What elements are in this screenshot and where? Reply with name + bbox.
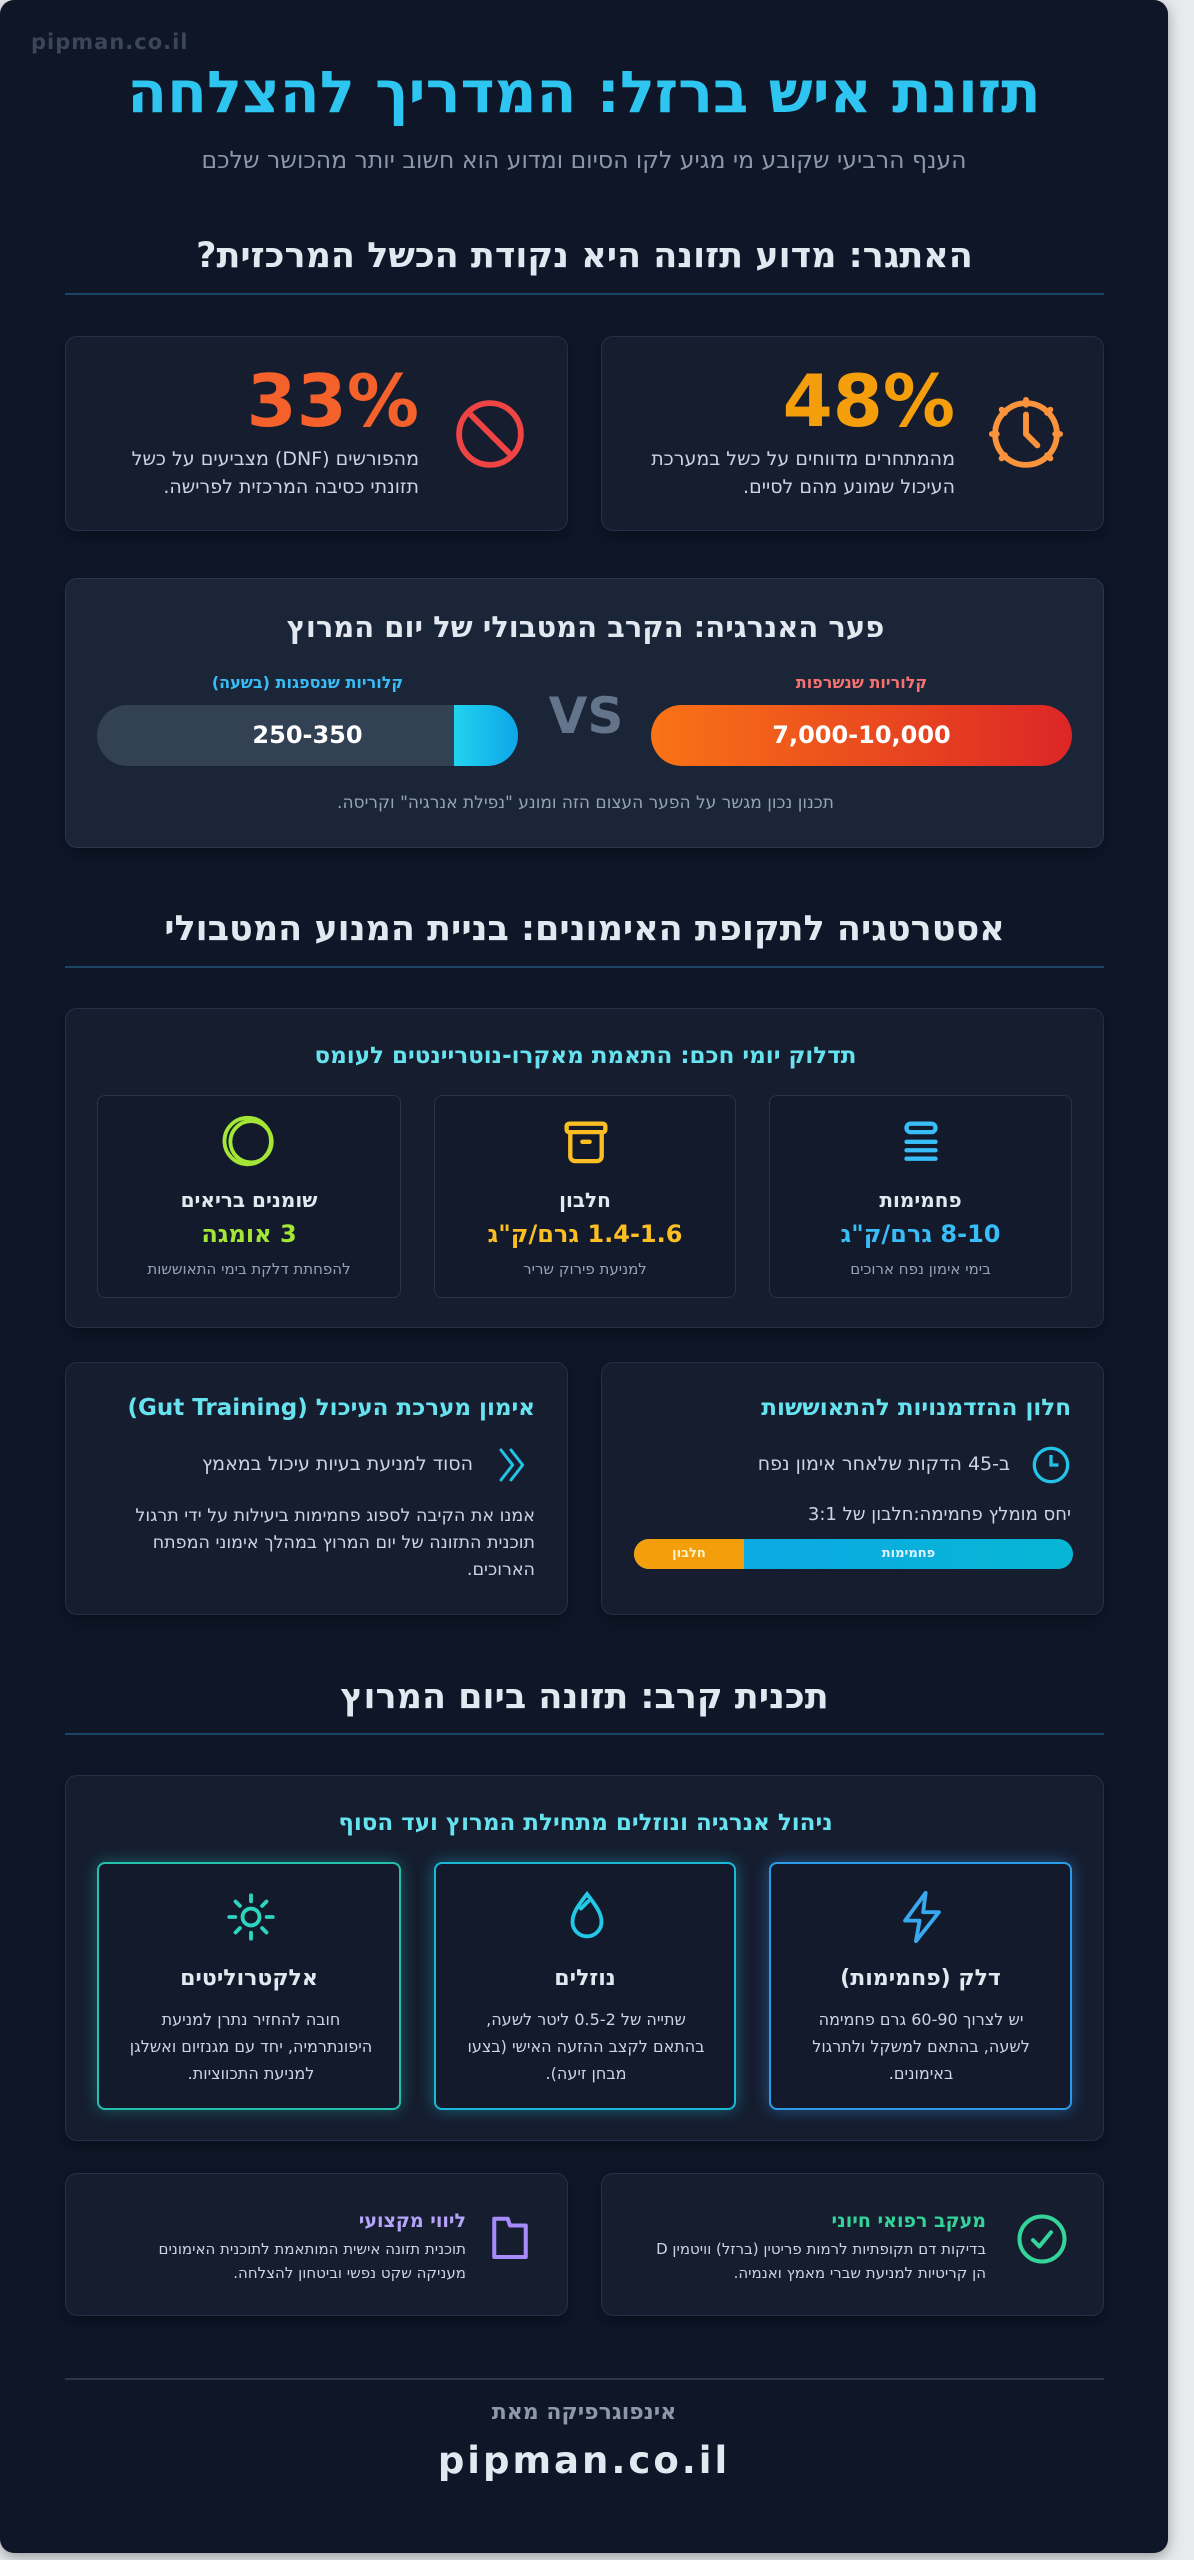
card: gut training: [65, 1362, 568, 1615]
card: professional guidance: תוכנית תזונה אישית המותאמת לתוכנית האימונים מעניקה שקט נפשי וביטחון להצלחה.: [158, 2240, 466, 2282]
box: carbs: בימי אימון נפח ארוכים: [850, 1260, 991, 1278]
icon: drop: [570, 1891, 604, 1938]
box: fats: שומנים בריאים: [181, 1188, 317, 1212]
card: recovery window: יחס מומלץ פחמימה:חלבון של 3:1: [808, 1504, 1071, 1525]
card: recovery window: [601, 1362, 1104, 1615]
icon: layers: [904, 1122, 938, 1161]
box: fats: 3 אומגה: [201, 1220, 297, 1248]
box: fuel: דלק (פחמימות): [840, 1966, 1001, 1991]
stat card: 33%: [65, 336, 568, 531]
box: carbs: [769, 1095, 1072, 1298]
panel: race day fueling: [65, 1775, 1104, 2141]
box: protein: [434, 1095, 736, 1298]
box: fuel: [769, 1862, 1072, 2110]
card: medical tracking: מעקב רפואי חיוני: [832, 2210, 986, 2232]
card: medical tracking: [601, 2173, 1104, 2316]
heading: race day: תכנית קרב: תזונה ביום המרוץ: [340, 1677, 829, 1717]
icon: chevrons: [499, 1448, 524, 1482]
icon: check circle: [1018, 2214, 1066, 2264]
icon: clock: [989, 397, 1063, 468]
title: תזונת איש ברזל: המדריך להצלחה: [127, 58, 1041, 126]
box: electrolytes: אלקטרוליטים: [180, 1966, 318, 1991]
panel title: תדלוק יומי חכם: התאמת מאקרו-נוטריינטים לעומס: [315, 1043, 856, 1069]
card: gut training: הסוד למניעת בעיות עיכול במאמץ: [202, 1453, 473, 1475]
subtitle: הענף הרביעי שקובע מי מגיע לקו הסיום ומדוע הוא חשוב יותר מהכושר שלכם: [202, 146, 966, 174]
bar absorbed: [97, 705, 518, 766]
footer: pipman.co.il: [438, 2439, 730, 2482]
stat card: 48%: [601, 336, 1104, 531]
label absorbed: קלוריות שנספגות (בשעה): [212, 673, 403, 692]
card: professional guidance: ליווי מקצועי: [359, 2210, 466, 2232]
icon: lightning: [903, 1890, 941, 1944]
bar burned: [651, 705, 1072, 766]
label burned: קלוריות שנשרפות: [796, 673, 927, 692]
ratio bar: חלבון: [672, 1546, 706, 1561]
stat number: 48%: [783, 359, 955, 443]
panel: energy gap: [65, 578, 1104, 848]
card: recovery window: חלון ההזדמנויות להתאוששות: [761, 1395, 1071, 1421]
icon: sun: [227, 1893, 275, 1941]
card: gut training: אימון מערכת העיכול (Gut Training): [127, 1395, 535, 1421]
card: professional guidance: [65, 2173, 568, 2316]
box: electrolytes: חובה להחזיר נתרן למניעת היפונתרמיה, יחד עם מגנזיום ואשלגן למניעת התכווציות.: [130, 2010, 372, 2083]
stat text: מהפורשים (DNF) מצביעים על כשל תזונתי כסיבה המרכזית לפרישה.: [132, 448, 419, 498]
ratio bar: פחמימות: [882, 1546, 935, 1561]
heading: challenge: האתגר: מדוע תזונה היא נקודת הכשל המרכזית?: [196, 236, 973, 276]
box: fats: [97, 1095, 401, 1298]
note: תכנון נכון מגשר על הפער העצום הזה ומונע "נפילת אנרגיה" וקריסה.: [337, 793, 834, 813]
card: recovery window: ב-45 הדקות שלאחר אימון נפח: [758, 1453, 1010, 1475]
stat number: 33%: [247, 359, 419, 443]
icon: container: [564, 1122, 608, 1164]
footer: אינפוגרפיקה מאת: [492, 2400, 676, 2425]
icon: file: [492, 2216, 528, 2259]
box: protein: חלבון: [559, 1188, 611, 1212]
stat text: מהמתחרים מדווחים על כשל במערכת העיכול שמונע מהם לסיים.: [651, 448, 955, 498]
footer: [438, 2400, 730, 2482]
icon: clock: [1032, 1446, 1070, 1484]
ratio bar: [634, 1539, 1073, 1569]
box: fluids: שתייה של 0.5-2 ליטר לשעה, בהתאם לקצב ההזעה האישי (בצעו מבחן זיעה).: [468, 2010, 704, 2083]
watermark: pipman.co.il: [31, 30, 188, 54]
box: protein: למניעת פירוק שריר: [523, 1260, 647, 1278]
box: carbs: פחמימות: [879, 1188, 962, 1212]
VS: VS: [549, 687, 623, 745]
box: fuel: יש לצרוך 60-90 גרם פחמימה לשעה, בהתאם למשקל ולתרגול באימונים.: [812, 2010, 1030, 2083]
box: protein: 1.4-1.6 גרם/ק"ג: [488, 1220, 682, 1248]
bar burned: 7,000-10,000: [772, 721, 951, 749]
icon: rings: [222, 1116, 274, 1166]
heading: training strategy: אסטרטגיה לתקופת האימונים: בניית המנוע המטבולי: [164, 909, 1005, 949]
panel title: פער האנרגיה: הקרב המטבולי של יום המרוץ: [287, 610, 884, 644]
panel: daily macros: [65, 1008, 1104, 1328]
card: medical tracking: בדיקות דם תקופתיות לרמות פריטין (ברזל) וויטמין D הן קריטיות למניעת שברי מאמץ ואנמיה.: [656, 2240, 986, 2282]
box: electrolytes: [97, 1862, 401, 2110]
box: fats: להפחתת דלקת בימי התאוששות: [147, 1260, 351, 1278]
box: fluids: נוזלים: [554, 1966, 616, 1991]
bar absorbed: 250-350: [252, 721, 363, 749]
panel: race day fueling: ניהול אנרגיה ונוזלים מתחילת המרוץ ועד הסוף: [338, 1810, 833, 1836]
box: carbs: 8-10 גרם/ק"ג: [841, 1220, 1000, 1248]
box: fluids: [434, 1862, 736, 2110]
icon: no sign: [456, 400, 524, 468]
card: gut training: אמנו את הקיבה לספוג פחמימות ביעילות על ידי תרגול תוכנית התזונה של יום המרוץ במהלך אימוני המפתח הארוכים.: [135, 1506, 535, 1580]
